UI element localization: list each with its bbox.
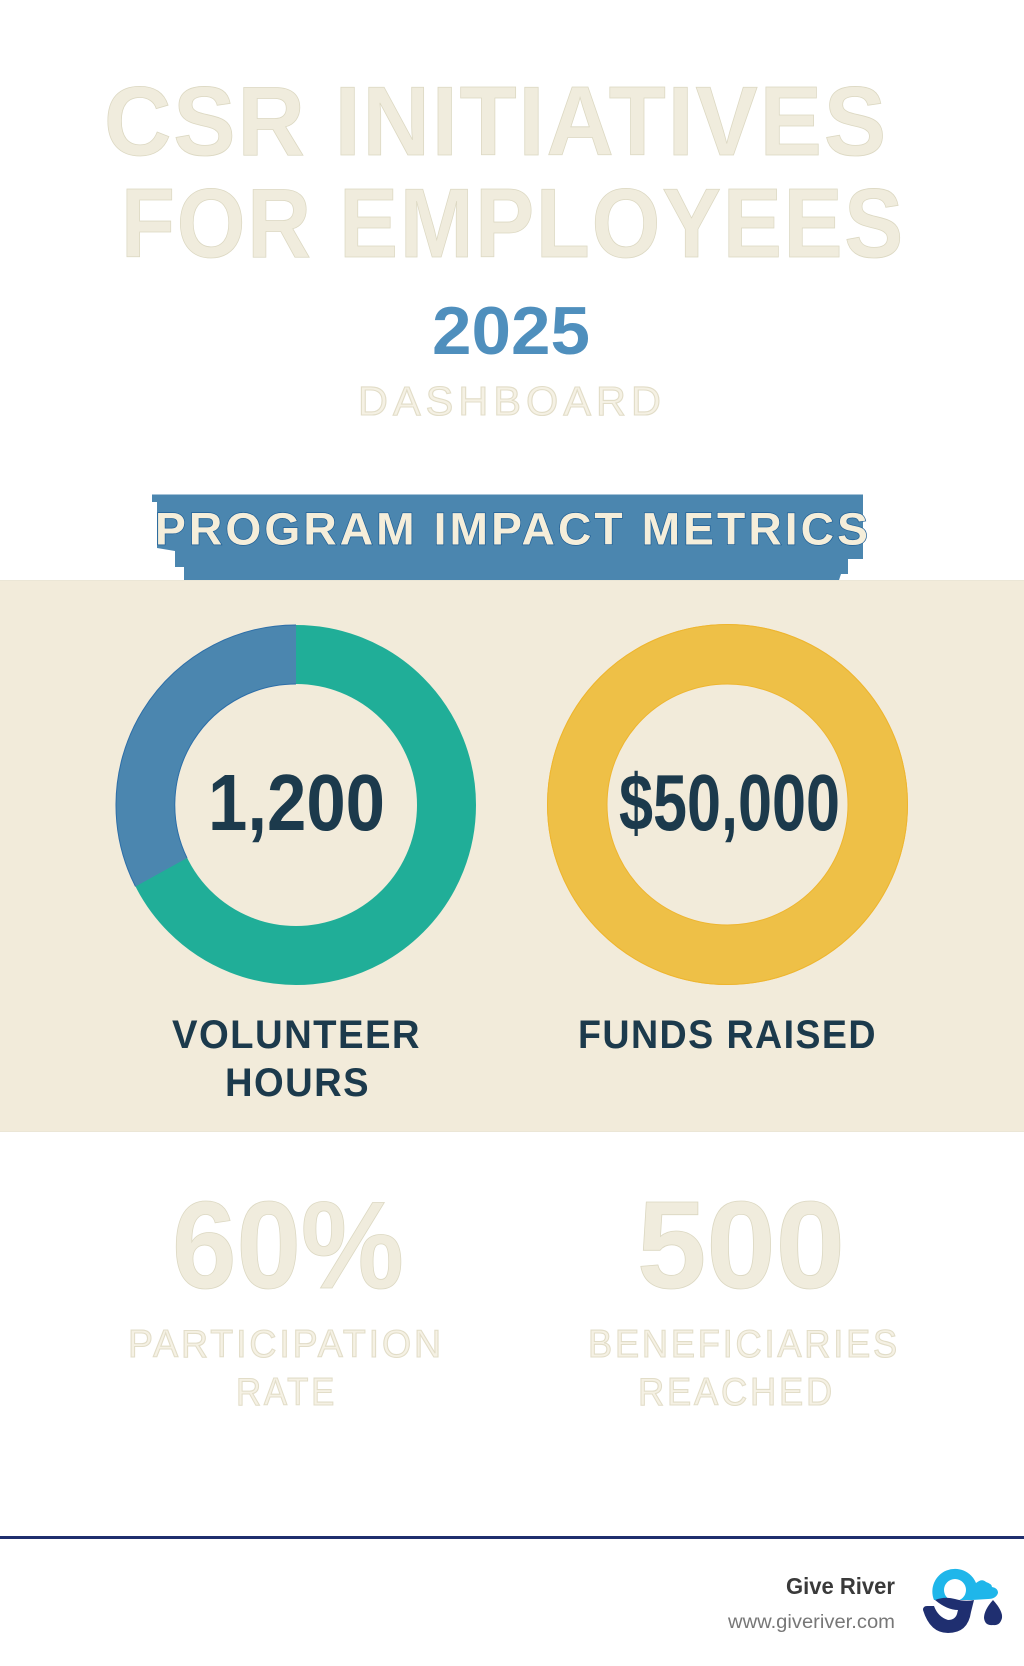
section banner: PROGRAM IMPACT METRICS [155,504,871,554]
label: volunteer hours: VOLUNTEER [172,1013,421,1057]
footer divider [0,1536,1024,1539]
stat: 500 beneficiaries reached: BENEFICIARIES [588,1323,900,1366]
title: CSR INITIATIVES [104,66,888,176]
stat: 500 beneficiaries reached: REACHED [638,1371,835,1414]
stat: 60% participation rate: 60% [172,1177,404,1315]
label: volunteer hours [172,1013,421,1105]
label: funds raised: FUNDS RAISED [578,1013,877,1057]
stat: 60% participation rate [128,1177,444,1414]
subtitle: dashboard: DASHBOARD [358,378,666,424]
icon: give river logo [923,1569,1002,1633]
title: FOR EMPLOYEES [121,168,905,278]
stat: 60% participation rate: PARTICIPATION [128,1323,444,1366]
title [104,66,905,278]
year heading: 2025 [432,293,590,369]
footer brand text: www.giveriver.com [727,1611,895,1633]
metric value: 1,200: 1,200 [208,758,385,847]
donut chart: volunteer hours [116,625,446,956]
stat: 60% participation rate: RATE [236,1371,337,1414]
label: volunteer hours: HOURS [225,1061,370,1105]
footer brand text [727,1573,895,1633]
metric value: $50,000: $50,000 [619,758,840,847]
footer brand text: Give River [786,1573,895,1599]
stat: 500 beneficiaries reached: 500 [637,1177,845,1315]
donut chart: funds raised [548,624,908,984]
section banner [152,494,871,580]
stat: 500 beneficiaries reached [588,1177,900,1414]
metrics panel background [0,580,1024,1132]
